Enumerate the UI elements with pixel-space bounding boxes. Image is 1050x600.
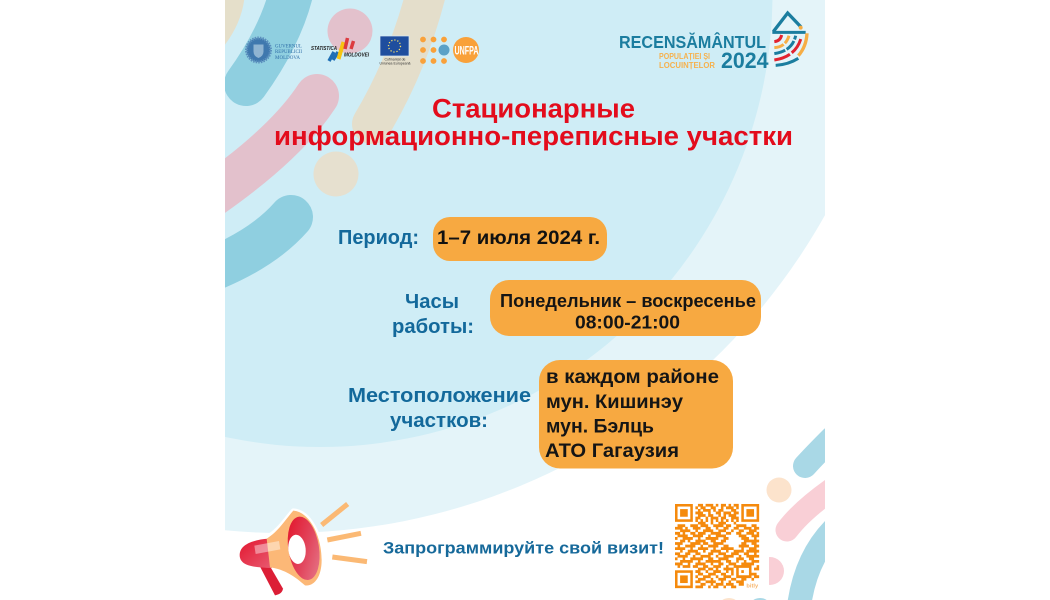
badge: hours: 08:00-21:00	[575, 312, 680, 332]
title: Стационарные	[432, 94, 635, 124]
badge: locations list: мун. Бэлць	[546, 416, 654, 438]
label: working hours: Часы	[405, 291, 459, 313]
badge: locations list: в каждом районе	[546, 366, 719, 388]
logo: census 2024: RECENSĂMÂNTUL	[619, 31, 766, 52]
icon: house with drop	[772, 13, 807, 65]
label: working hours: работы:	[392, 316, 474, 338]
row: working hours	[392, 280, 761, 338]
logo: census 2024	[619, 13, 807, 73]
label: period: Период:	[338, 227, 419, 249]
badge: locations list: АТО Гагаузия	[545, 440, 679, 462]
title	[274, 94, 793, 151]
badge: locations list: мун. Кишинэу	[546, 391, 683, 413]
badge: dates	[433, 217, 607, 261]
QR code: bitly	[746, 583, 759, 589]
logo: government of Moldova	[246, 38, 303, 62]
logo: European Union: Uniunea Europeană	[380, 62, 410, 66]
logo: Statistica Moldovei: STATISTICA	[311, 46, 337, 52]
row: period	[338, 217, 607, 261]
logo: census 2024: POPULAȚIEI ȘI	[659, 52, 710, 61]
badge: hours	[490, 280, 761, 336]
logo: government of Moldova: MOLDOVA	[275, 55, 300, 61]
logo: UNFPA: UNFPA	[454, 44, 479, 58]
logo: European Union	[380, 36, 410, 66]
logo: census 2024: 2024	[721, 48, 769, 73]
infographic canvas	[225, 0, 825, 600]
logo: UNFPA	[420, 37, 479, 64]
badge: locations list	[539, 360, 733, 468]
logo: Statistica Moldovei	[311, 38, 369, 61]
QR code	[675, 505, 759, 589]
logo: government of Moldova: REPUBLICII	[275, 49, 302, 55]
logo: government of Moldova: GUVERNUL	[275, 44, 303, 50]
logo: census 2024: LOCUINȚELOR	[659, 61, 715, 70]
title: информационно-переписные участки	[274, 121, 793, 151]
badge: dates: 1–7 июля 2024 г.	[437, 227, 600, 249]
panel: background	[225, 0, 825, 600]
badge: hours: Понедельник – воскресенье	[500, 291, 756, 311]
row: locations	[348, 360, 733, 468]
label: locations: участков:	[390, 410, 488, 432]
label: working hours	[392, 291, 474, 338]
logo: Statistica Moldovei: MOLDOVEI	[344, 52, 369, 58]
icon: megaphone	[240, 504, 367, 596]
call to action: Запрограммируйте свой визит!	[383, 538, 664, 558]
label: locations	[348, 385, 531, 432]
label: locations: Местоположение	[348, 385, 531, 407]
logo: European Union: Cofinanțat de	[384, 58, 406, 62]
